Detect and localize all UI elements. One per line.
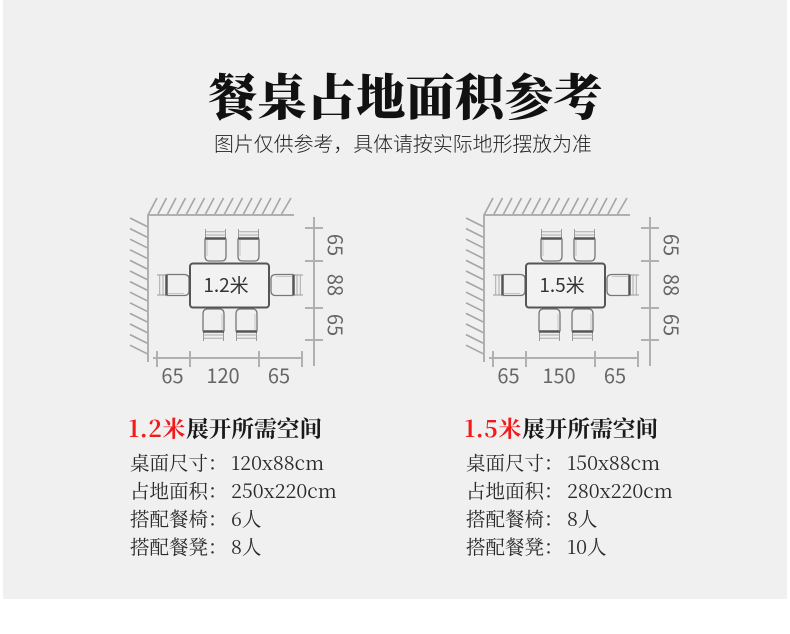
depth dimensions: 88 [658, 274, 687, 296]
heading: 1.5m specs: 1.5米展开所需空间 [464, 412, 658, 444]
specs list: 1.2m: 占地面积： [130, 476, 228, 504]
subtitle: 图片仅供参考，具体请按实际地形摆放为准 [214, 134, 592, 156]
depth dimensions [658, 234, 687, 336]
depth dimensions: 65 [658, 314, 687, 336]
width dimensions [497, 360, 626, 389]
specs list: 1.5m: 桌面尺寸： [466, 448, 564, 476]
depth dimensions: 65 [322, 314, 351, 336]
specs list: 1.2m: 120x88cm [231, 448, 324, 476]
heading: 1.2m specs: 1.2米展开所需空间 [128, 412, 322, 444]
depth dimensions: 65 [322, 234, 351, 256]
diagram: 1.5m table [466, 198, 687, 389]
table label: 1.5米 [539, 271, 585, 298]
specs list: 1.5m: 搭配餐凳： [466, 532, 564, 560]
specs list: 1.2m: 搭配餐凳： [130, 532, 228, 560]
specs list: 1.2m: 8人 [231, 532, 261, 560]
specs list: 1.5m: 8人 [567, 504, 597, 532]
specs list: 1.5m: 10人 [567, 532, 607, 560]
specs list: 1.5m: 280x220cm [567, 476, 673, 504]
specs list: 1.2m: 250x220cm [231, 476, 337, 504]
width dimensions: 150 [542, 360, 576, 389]
title: 餐桌占地面积参考 [208, 59, 603, 130]
specs list: 1.5m: 搭配餐椅： [466, 504, 564, 532]
specs list: 1.5m: 占地面积： [466, 476, 564, 504]
table label: 1.2米 [203, 271, 249, 298]
width dimensions: 120 [206, 360, 240, 389]
width dimensions: 65 [161, 360, 184, 389]
depth dimensions [322, 234, 351, 336]
specs list: 1.2m: 6人 [231, 504, 261, 532]
specs list: 1.2m [130, 448, 337, 560]
diagram: 1.2m table [130, 198, 351, 389]
specs list: 1.2m: 搭配餐椅： [130, 504, 228, 532]
width dimensions [161, 360, 290, 389]
width dimensions: 65 [497, 360, 520, 389]
width dimensions: 65 [268, 360, 290, 389]
depth dimensions: 88 [322, 274, 351, 296]
specs list: 1.5m: 150x88cm [567, 448, 660, 476]
specs list: 1.2m: 桌面尺寸： [130, 448, 228, 476]
specs list: 1.5m [466, 448, 673, 560]
depth dimensions: 65 [658, 234, 687, 256]
width dimensions: 65 [604, 360, 626, 389]
